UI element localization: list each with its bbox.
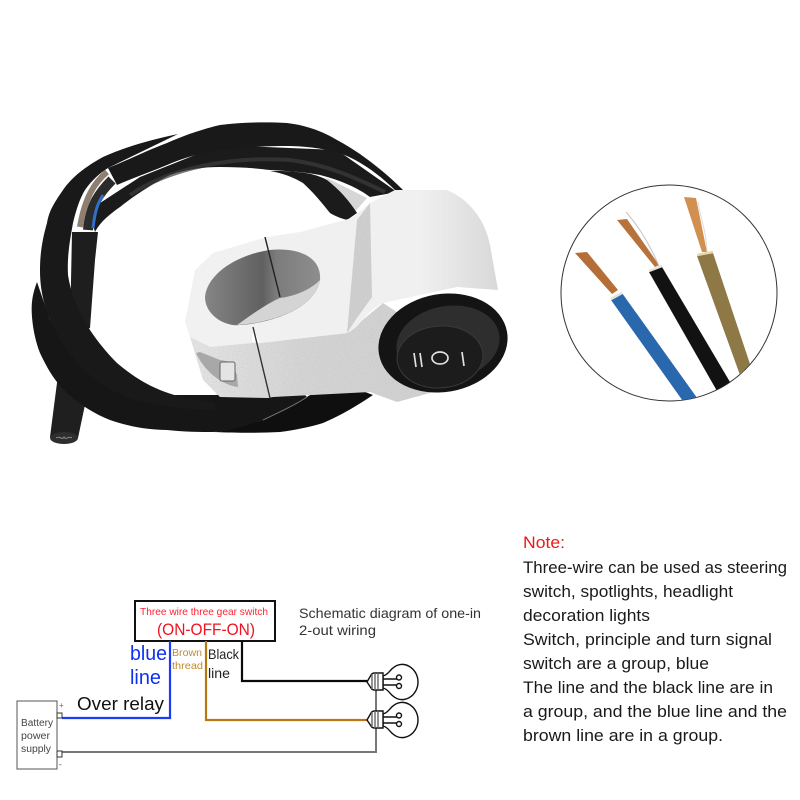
note body: Switch, principle and turn signal (523, 631, 772, 649)
wire label: blue line: blue (130, 643, 167, 665)
switch box: (ON-OFF-ON) (157, 620, 255, 639)
wire inset circle (561, 185, 777, 404)
tail end of cable (50, 432, 78, 444)
inner wires (80, 172, 112, 230)
black wire (649, 267, 730, 391)
clamp screw (196, 352, 238, 387)
wire label: brown thread: Brown (172, 647, 202, 659)
wire label: brown thread: thread (172, 660, 203, 672)
wire label: blue line (130, 643, 167, 689)
schematic caption: Schematic diagram of one-in (299, 605, 481, 621)
wire label: black line (208, 646, 240, 681)
brown wire (206, 641, 368, 720)
note body: Three-wire can be used as steering (523, 559, 787, 577)
note body: switch are a group, blue (523, 655, 709, 673)
battery power supply: + (59, 701, 64, 710)
blue wire (611, 293, 700, 404)
battery power supply: supply (21, 744, 51, 755)
metal clamp side face (190, 303, 470, 402)
product photo: handlebar switch with cable (32, 122, 516, 444)
battery power supply: power (21, 731, 51, 742)
clamp hole (205, 250, 320, 325)
icon: bulb upper (367, 664, 418, 700)
metal clamp top face (185, 190, 498, 347)
note body: a group, and the blue line and the (523, 703, 787, 721)
schematic caption: 2-out wiring (299, 622, 376, 638)
wire end collars (611, 252, 713, 299)
note body (523, 559, 787, 745)
note text block (523, 534, 787, 745)
over relay label: Over relay (77, 694, 164, 714)
brown wire (697, 253, 750, 375)
rocker button (395, 323, 485, 391)
battery power supply (17, 701, 64, 769)
note heading: Note: (523, 534, 565, 552)
note body: decoration lights (523, 607, 650, 625)
switch box (135, 601, 275, 641)
schematic caption (299, 605, 481, 638)
wire label: brown thread (172, 647, 203, 672)
copper strands (575, 197, 707, 294)
battery power supply: - (59, 760, 62, 769)
wire label: black line: Black (208, 646, 240, 662)
ground wire (62, 687, 376, 752)
blue wire (62, 641, 170, 718)
wire label: blue line: line (130, 667, 161, 689)
sleeve end (108, 122, 403, 192)
switch box: Three wire three gear switch (140, 606, 268, 618)
wire label: black line: line (208, 665, 230, 681)
switch bezel (370, 283, 516, 403)
black wire (242, 641, 368, 681)
rocker symbols (414, 352, 464, 367)
cable bundle (32, 134, 397, 438)
wiring schematic (17, 601, 481, 769)
icon: bulb lower (367, 702, 418, 738)
note body: The line and the black line are in (523, 679, 773, 697)
note body: brown line are in a group. (523, 727, 723, 745)
battery power supply: Battery (21, 718, 53, 729)
note body: switch, spotlights, headlight (523, 583, 733, 601)
